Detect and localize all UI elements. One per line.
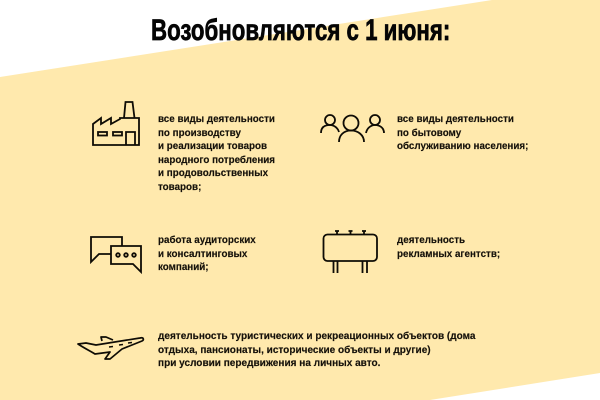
text: tourism: при условии передвижения на личных авто. bbox=[158, 358, 380, 369]
text: audit companies: компаний; bbox=[158, 262, 209, 273]
title: Возобновляются с 1 июня: bbox=[151, 14, 450, 47]
text: production bbox=[158, 114, 275, 193]
text: tourism: отдыха, пансионаты, исторические объекты и другие) bbox=[158, 345, 431, 356]
text: tourism: деятельность туристических и рекреационных объектов (дома bbox=[158, 331, 476, 342]
text: production: все виды деятельности bbox=[158, 114, 275, 125]
text: production: и продовольственных bbox=[158, 168, 268, 179]
text: production: народного потребления bbox=[158, 155, 275, 166]
text: advertising agencies bbox=[397, 235, 500, 260]
text: tourism bbox=[158, 331, 476, 369]
text: production: товаров; bbox=[158, 182, 201, 193]
text: advertising agencies: рекламных агентств; bbox=[397, 249, 500, 260]
text: audit companies bbox=[158, 235, 256, 273]
text: consumer services: обслуживанию населения; bbox=[397, 141, 528, 152]
text: consumer services: по бытовому bbox=[397, 128, 461, 139]
text: production: по производству bbox=[158, 128, 241, 139]
text: audit companies: работа аудиторских bbox=[158, 235, 256, 246]
text: production: и реализации товаров bbox=[158, 141, 267, 152]
text: audit companies: и консалтинговых bbox=[158, 249, 247, 260]
text: consumer services: все виды деятельности bbox=[397, 114, 514, 125]
text: consumer services bbox=[397, 114, 528, 152]
text: advertising agencies: деятельность bbox=[397, 235, 465, 246]
